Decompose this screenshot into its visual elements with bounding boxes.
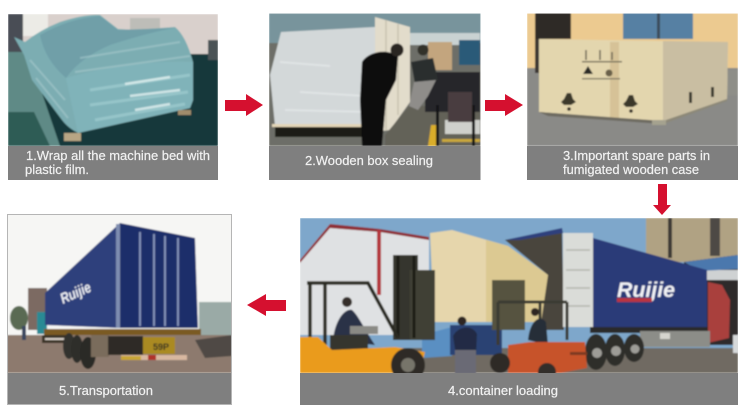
panel: step 1 wrap machine bed <box>8 14 218 180</box>
caption: step 3: 3.Important spare parts in <box>563 148 710 163</box>
arrow: step 1 to step 2 <box>225 94 263 116</box>
arrow: step 2 to step 3 <box>485 94 523 116</box>
photo: container truck on the road <box>7 214 232 373</box>
photo: container truck on the road: 59P <box>153 342 169 352</box>
photo: fumigated wooden crate <box>527 13 738 146</box>
panel: step 4 container loading <box>300 218 739 405</box>
photo: forklifts loading crate into container <box>300 218 739 382</box>
caption: step 2: 2.Wooden box sealing <box>305 153 433 168</box>
caption: step 5 <box>7 373 232 405</box>
arrow: step 3 to step 4 <box>653 184 671 215</box>
photo: machine wrapped in plastic film <box>8 14 218 146</box>
caption: step 3: fumigated wooden case <box>563 162 699 177</box>
panel: step 5 transportation <box>7 214 232 405</box>
panel: step 3 fumigated wooden case <box>527 13 738 180</box>
caption: step 1: plastic film. <box>25 162 89 177</box>
caption: step 1: 1.Wrap all the machine bed with <box>26 148 210 163</box>
caption: step 4 <box>300 373 738 405</box>
logo: Ruijie on truck: Ruijie <box>58 279 94 308</box>
arrow: step 4 to step 5 <box>247 294 286 316</box>
caption: step 2 <box>269 146 480 180</box>
caption: step 1 <box>8 146 218 180</box>
caption: step 4: 4.container loading <box>448 383 558 398</box>
panel: step 2 wooden box sealing <box>269 13 481 180</box>
photo: workers sealing the wooden box <box>269 13 481 146</box>
caption: step 3 <box>527 146 738 180</box>
logo: Ruijie on container: Ruijie <box>617 279 675 302</box>
caption: step 5: 5.Transportation <box>59 383 153 398</box>
